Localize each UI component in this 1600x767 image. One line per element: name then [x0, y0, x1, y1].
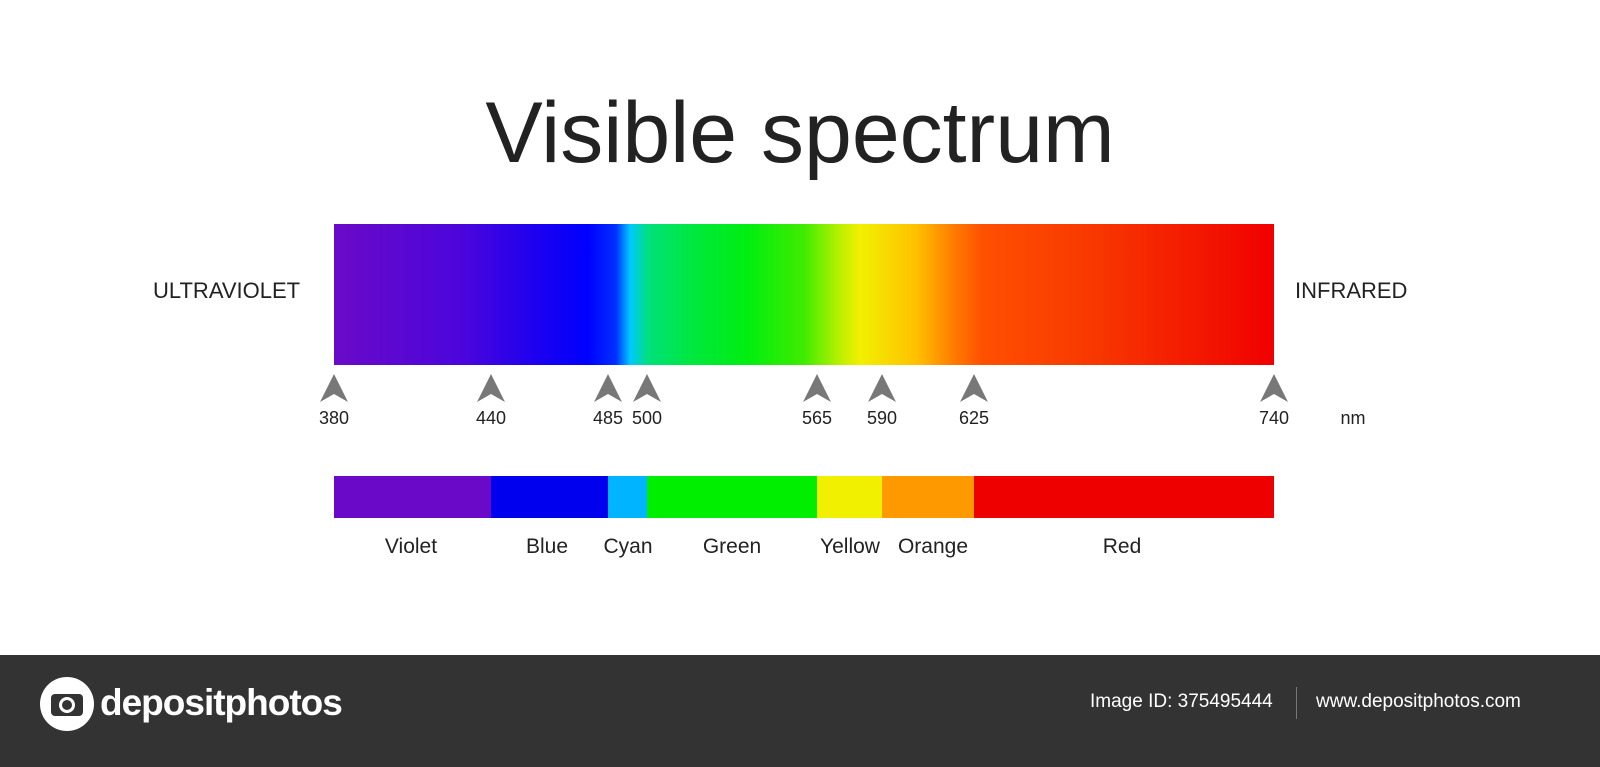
wavelength markers: 590 — [867, 408, 897, 428]
wavelength markers: 440 — [476, 408, 506, 428]
wavelength markers: 625 — [959, 408, 989, 428]
wavelength markers: 500 — [632, 408, 662, 428]
wavelength markers: 380 — [319, 408, 349, 428]
wavelength markers — [319, 374, 1366, 428]
color labels: Green — [703, 535, 761, 558]
gradient spectrum bar — [334, 224, 1274, 365]
color labels: Blue — [526, 535, 568, 558]
wavelength markers: 740 — [1259, 408, 1289, 428]
title: Visible spectrum — [485, 85, 1115, 181]
wavelength markers: nm — [1340, 408, 1366, 428]
label: ultraviolet: ULTRAVIOLET — [153, 278, 300, 303]
color labels: Cyan — [603, 535, 653, 558]
color labels: Orange — [898, 535, 968, 558]
icon: camera logo — [40, 677, 94, 731]
color labels: Yellow — [820, 535, 880, 558]
color labels: Violet — [385, 535, 437, 558]
website: www.depositphotos.com — [1316, 691, 1521, 712]
color band bar — [334, 476, 1274, 518]
color labels: Red — [1103, 535, 1141, 558]
footer — [0, 655, 1600, 767]
wavelength markers: 485 — [593, 408, 623, 428]
label: infrared: INFRARED — [1295, 278, 1407, 303]
brand name: depositphotos — [100, 682, 342, 723]
color labels — [385, 535, 1141, 558]
image id: Image ID: 375495444 — [1090, 691, 1273, 712]
wavelength markers: 565 — [802, 408, 832, 428]
